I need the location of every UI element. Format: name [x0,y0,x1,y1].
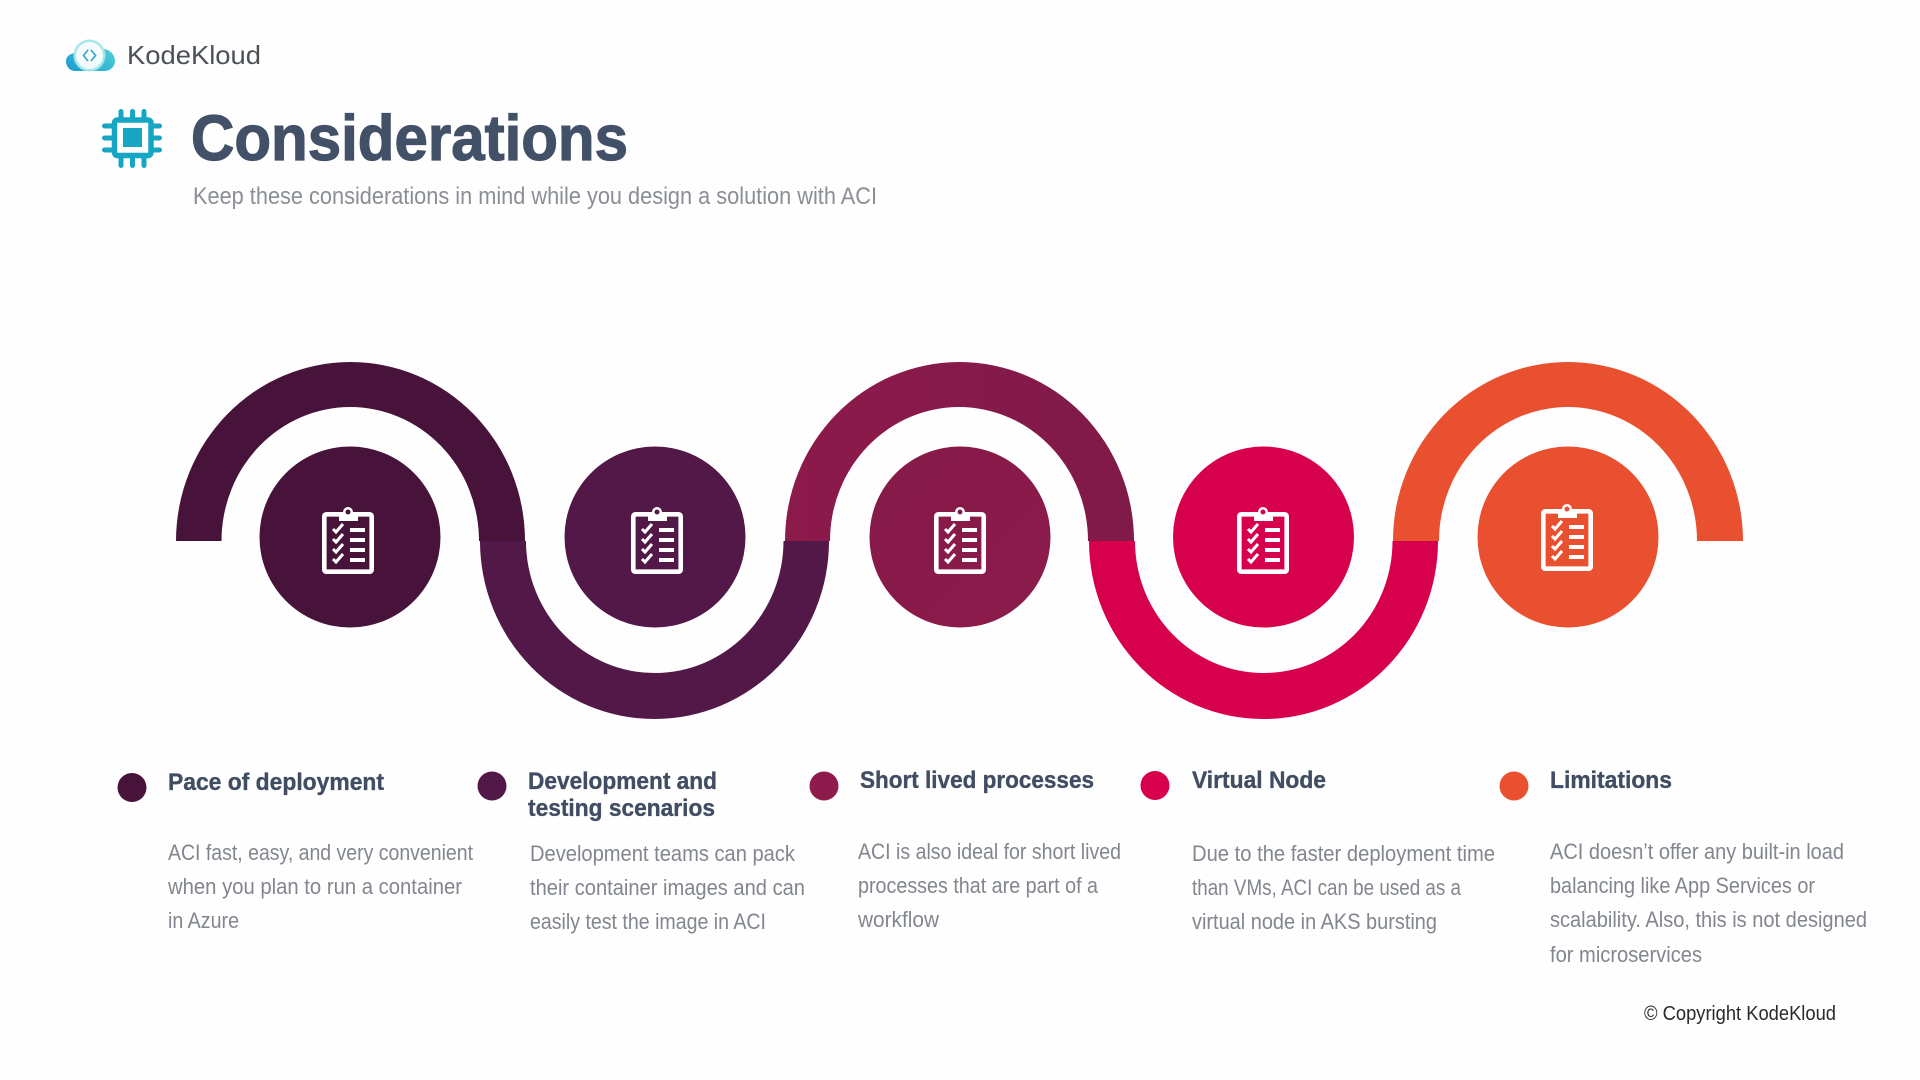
description [167,840,473,933]
icon: clipboard [1543,504,1591,569]
panel: pace of deployment [118,769,473,933]
heading: testing scenarios [528,795,715,822]
description: easily test the image in ACI [530,909,766,934]
description: ACI fast, easy, and very convenient [168,840,473,865]
description: Development teams can pack [530,841,796,866]
icon: clipboard [324,507,372,572]
icon: processor chip [104,112,160,166]
heading: Short lived processes [860,767,1094,794]
description: virtual node in AKS bursting [1192,909,1437,934]
subtitle: Keep these considerations in mind while you design a solution with ACI [193,183,877,210]
title: Considerations [191,102,628,174]
bullet [1500,772,1528,800]
panel: short lived processes [810,767,1121,932]
bullet [478,772,506,800]
bullet [1140,771,1170,800]
step 3 circle with clipboard icon [870,446,1050,628]
description [1192,841,1495,934]
heading: Development and [528,768,717,795]
heading: Virtual Node [1192,767,1326,794]
description [530,841,805,934]
icon: cloud [66,40,115,72]
copyright: © Copyright KodeKloud [1644,1003,1836,1025]
description: for microservices [1550,942,1702,967]
logo: KodeKloud [66,40,261,72]
logo wordmark: KodeKloud [127,40,261,70]
arc 5 [1393,362,1743,541]
description: than VMs, ACI can be used as a [1192,875,1462,900]
bullet [118,773,146,802]
step 2 circle with clipboard icon [564,446,746,628]
arc 2 [480,541,829,719]
icon: clipboard [633,507,681,572]
heading: Limitations [1550,767,1672,794]
step 1 circle with clipboard icon [260,446,440,628]
panel: virtual node [1140,767,1495,934]
description: scalability. Also, this is not designed [1550,907,1867,932]
description: workflow [857,907,939,932]
description: processes that are part of a [858,873,1099,898]
panel: development and testing scenarios [478,768,805,934]
arc 1 [176,362,525,541]
icon: clipboard [936,507,984,572]
heading [528,768,717,822]
arc 4 [1089,541,1438,719]
description: balancing like App Services or [1550,873,1815,898]
panel: limitations [1500,767,1867,967]
step 5 circle with clipboard icon [1478,446,1658,628]
description: their container images and can [530,875,805,900]
serpentine timeline [176,362,1743,719]
heading: Pace of deployment [168,769,384,796]
bullet [810,772,838,800]
description [857,839,1121,932]
description: Due to the faster deployment time [1192,841,1495,866]
description: ACI is also ideal for short lived [858,839,1121,864]
icon: clipboard [1239,507,1287,572]
arc 3 [785,362,1134,541]
description [1550,839,1867,967]
description: in Azure [168,908,239,933]
description: when you plan to run a container [167,874,462,899]
step 4 circle with clipboard icon [1173,446,1354,628]
description: ACI doesn’t offer any built-in load [1550,839,1844,864]
